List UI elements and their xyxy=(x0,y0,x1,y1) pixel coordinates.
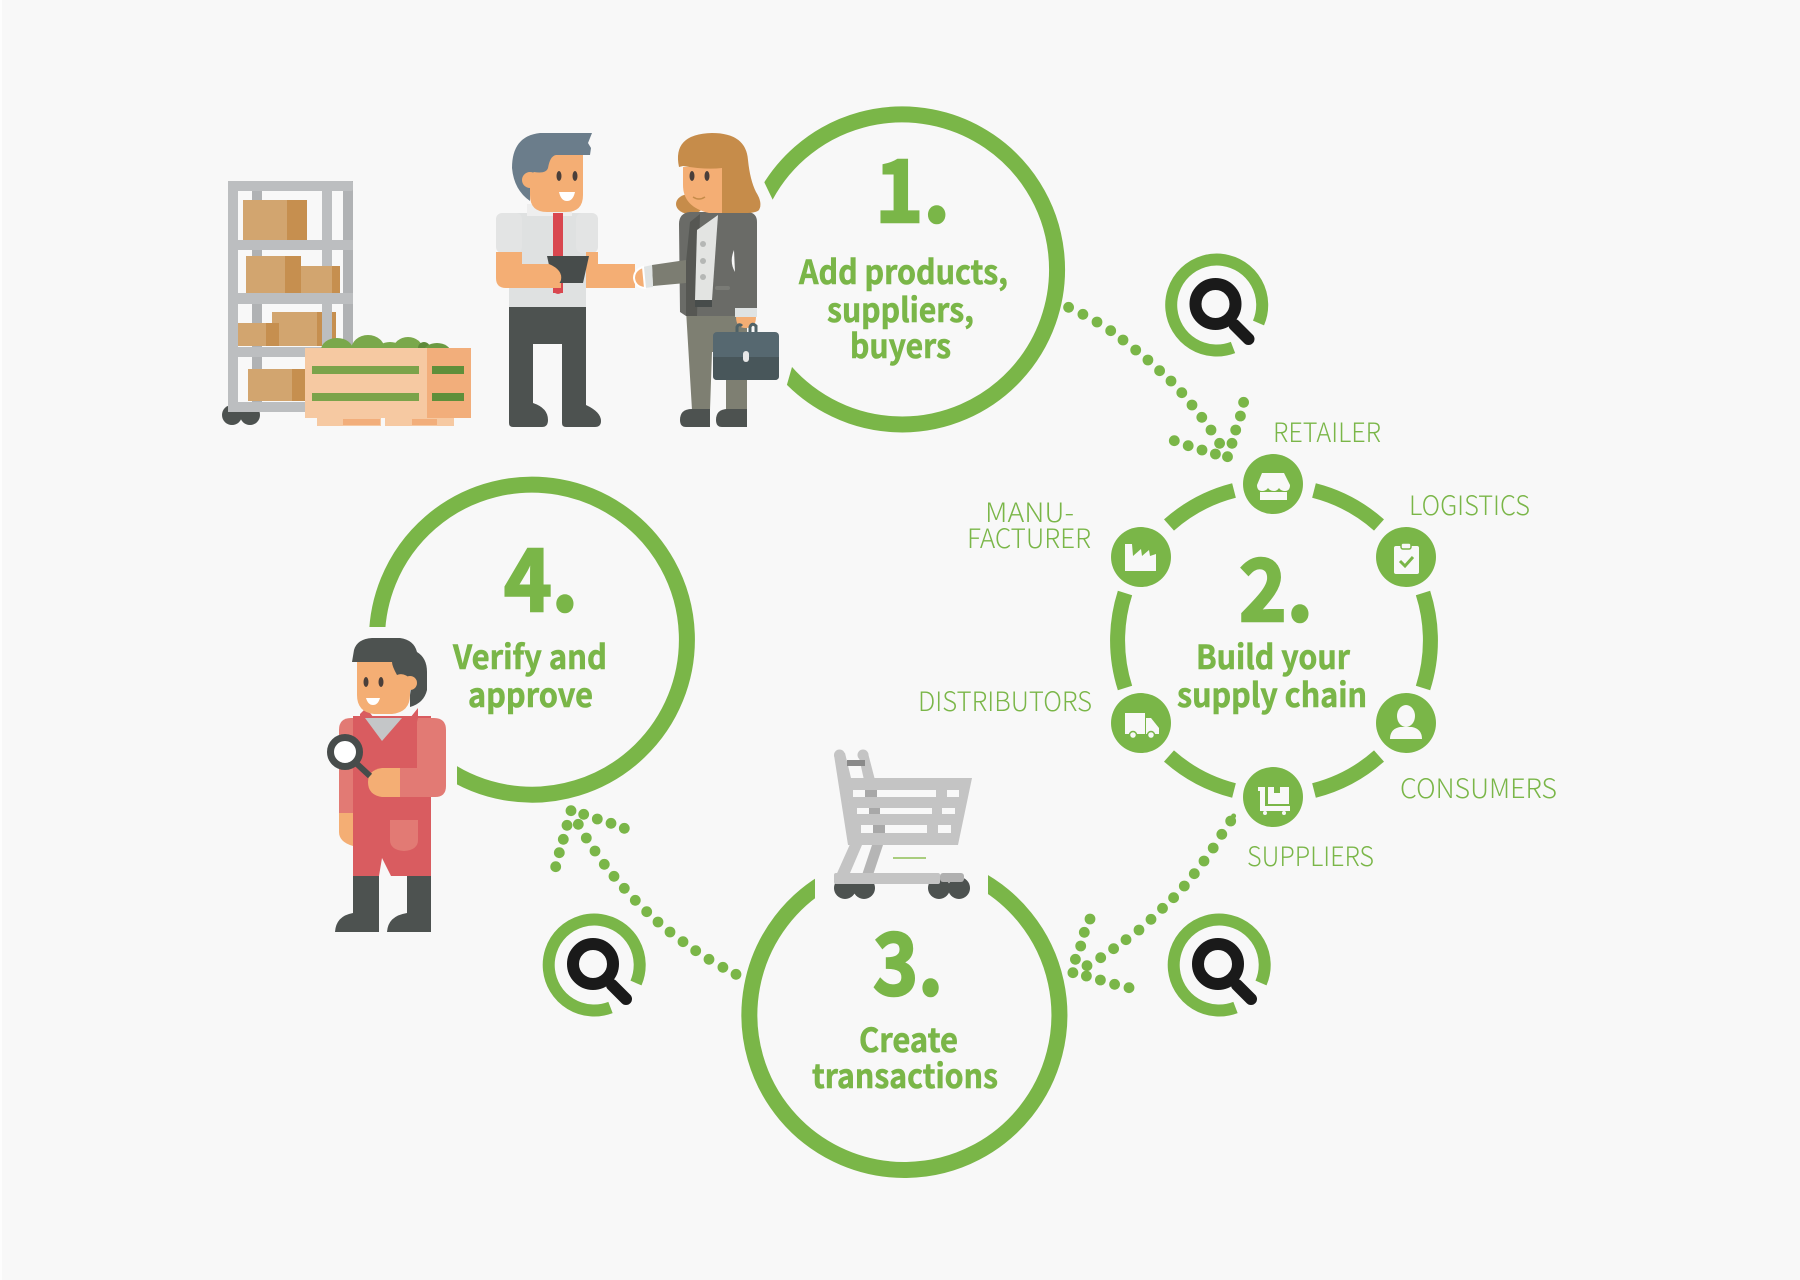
step 3 ring xyxy=(749,860,1059,1170)
step 2 heading xyxy=(1177,631,1367,717)
icon: consumer person xyxy=(1376,693,1436,753)
illustration: crate of vegetables xyxy=(305,335,471,426)
step 3 number: 3. xyxy=(873,895,943,1020)
step 2 heading: Build your xyxy=(1196,631,1351,679)
step 3 panel xyxy=(749,860,1059,1170)
step 2 heading: supply chain xyxy=(1177,669,1367,717)
label: manufacturer: MANU- xyxy=(985,491,1074,530)
illustration: warehouse shelf with boxes xyxy=(222,181,353,425)
icon: distributors truck xyxy=(1111,693,1171,753)
magnifier icon between step 3 and step 4 xyxy=(549,920,640,1011)
dotted arrow from step 2 to step 3 xyxy=(1068,816,1236,993)
magnifier icon between step 2 and step 3 xyxy=(1174,920,1265,1011)
label: logistics: LOGISTICS xyxy=(1409,484,1530,523)
label: suppliers: SUPPLIERS xyxy=(1247,835,1374,874)
step 3 heading: Create xyxy=(859,1014,958,1062)
step 3 heading xyxy=(812,1014,998,1098)
step 1 heading xyxy=(798,246,1008,368)
icon: suppliers trolley xyxy=(1239,763,1307,831)
step 4 ring xyxy=(360,485,687,800)
illustration: man shaking hands xyxy=(496,133,635,427)
step 1 panel xyxy=(740,114,1057,424)
step 4 heading: Verify and xyxy=(452,631,607,679)
label: consumers: CONSUMERS xyxy=(1400,767,1557,806)
label: manufacturer: FACTURER xyxy=(967,517,1091,556)
dotted arrow from step 1 to step 2 xyxy=(1063,302,1249,462)
step 4 heading: approve xyxy=(468,669,593,717)
step 2 panel xyxy=(918,411,1557,874)
icon: manufacturer factory xyxy=(1111,527,1171,587)
label: manufacturer xyxy=(967,491,1091,556)
step 1 number: 1. xyxy=(875,122,950,247)
illustration: woman with briefcase xyxy=(634,133,779,427)
step 1 heading: suppliers, xyxy=(827,284,974,332)
step 2 number: 2. xyxy=(1239,521,1313,646)
step 4 number: 4. xyxy=(504,511,578,636)
icon: logistics clipboard xyxy=(1376,527,1436,587)
label: retailer: RETAILER xyxy=(1273,411,1381,450)
dotted arrow from step 3 to step 4 xyxy=(550,805,741,980)
step 4 panel xyxy=(360,485,687,800)
step 4 heading xyxy=(452,631,607,717)
step 3 heading: transactions xyxy=(812,1050,998,1098)
dot remnant at suppliers icon edge xyxy=(1231,814,1236,818)
illustration: shopping cart xyxy=(834,750,972,899)
magnifier icon between step 1 and step 2 xyxy=(1171,260,1262,351)
step 2 segmented ring xyxy=(1118,490,1430,790)
label: distributors: DISTRIBUTORS xyxy=(918,680,1092,719)
illustration: inspector with magnifying glass xyxy=(330,638,446,932)
step 1 heading: Add products, xyxy=(798,246,1008,294)
icon: retailer xyxy=(1243,454,1303,514)
step 1 ring xyxy=(740,114,1057,424)
step 1 heading: buyers xyxy=(850,320,951,368)
